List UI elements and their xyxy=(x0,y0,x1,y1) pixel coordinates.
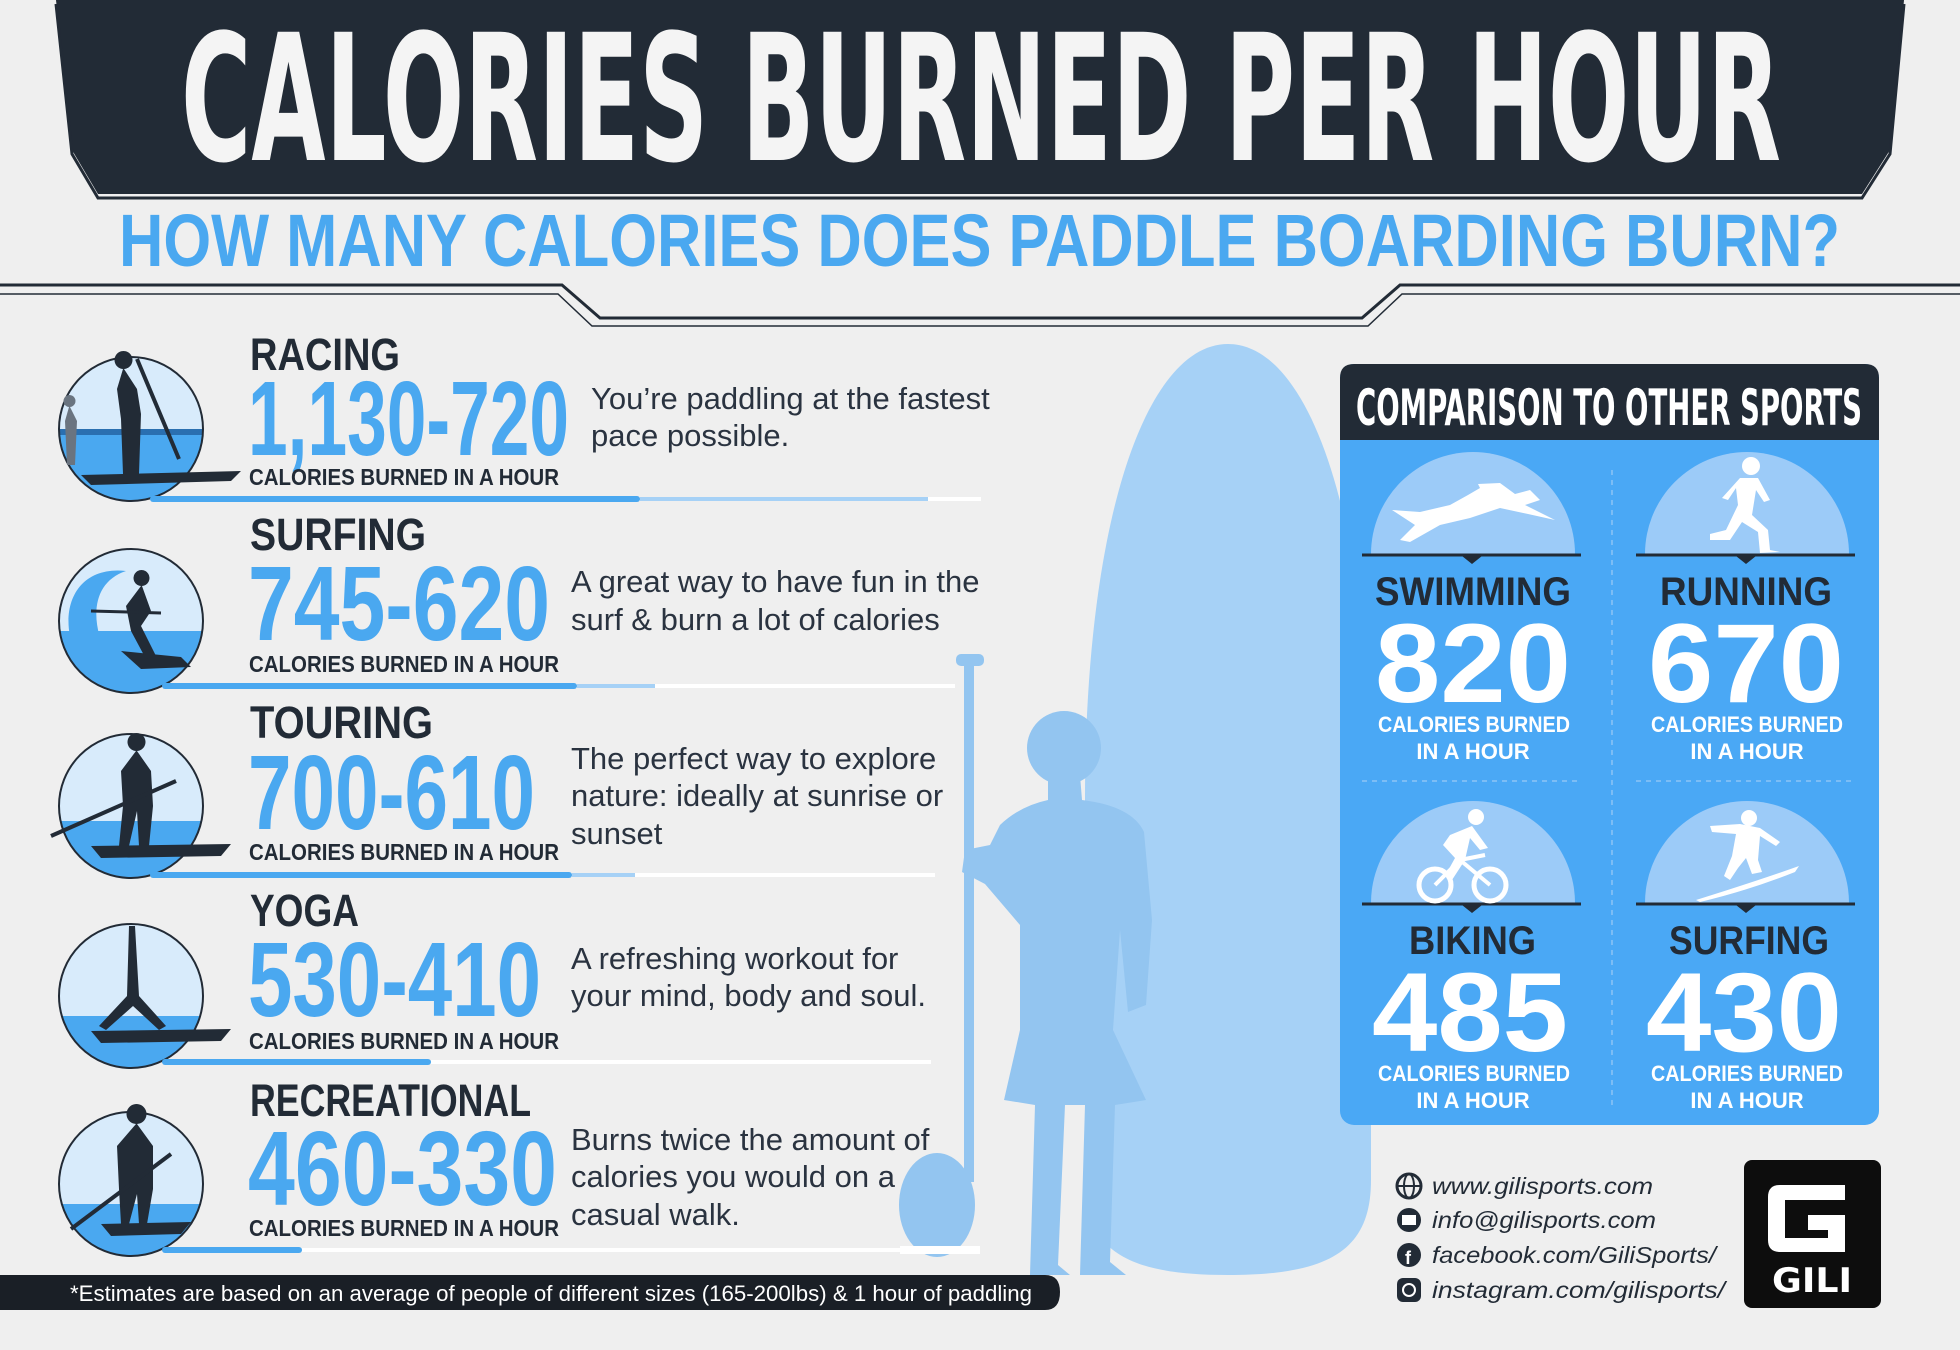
silhouette: paddle xyxy=(899,654,984,1257)
description: surfing: surf & burn a lot of calories xyxy=(571,602,940,637)
card: swimming xyxy=(1362,452,1581,764)
icon: yoga xyxy=(58,923,231,1069)
contacts: www.gilisports.com xyxy=(1432,1173,1653,1199)
icon: racing xyxy=(51,349,241,509)
card: biking: CALORIES BURNED xyxy=(1378,1061,1570,1086)
icon: runner xyxy=(1636,452,1855,564)
card: running: CALORIES BURNED xyxy=(1651,712,1843,737)
row: surfing: CALORIES BURNED IN A HOUR xyxy=(249,651,559,677)
number: surfing: 745-620 xyxy=(248,545,550,663)
icon: facebook xyxy=(1397,1243,1421,1268)
icon: touring xyxy=(51,726,231,886)
description: yoga: your mind, body and soul. xyxy=(571,978,926,1013)
description: racing: pace possible. xyxy=(591,418,789,453)
description: touring: The perfect way to explore xyxy=(571,741,936,776)
card: surfing: SURFING xyxy=(1669,919,1829,963)
number: racing: 1,130-720 xyxy=(248,360,569,478)
icon: email xyxy=(1397,1208,1421,1232)
card: running xyxy=(1636,452,1855,764)
row: recreational xyxy=(58,1084,930,1257)
card: surfing: CALORIES BURNED xyxy=(1651,1061,1843,1086)
description: recreational: Burns twice the amount of xyxy=(571,1122,930,1157)
silhouette: paddle board xyxy=(1085,344,1371,1275)
silhouette: man xyxy=(962,711,1152,1275)
card: surfing: 430 xyxy=(1646,950,1842,1075)
label: surfing: SURFING xyxy=(250,509,426,560)
icon: swimmer xyxy=(1362,452,1581,564)
card: running: IN A HOUR xyxy=(1690,739,1804,764)
card: swimming: CALORIES BURNED xyxy=(1378,712,1570,737)
card: biking: BIKING xyxy=(1409,919,1536,963)
description: touring: nature: ideally at sunrise or xyxy=(571,778,943,813)
description: surfing: A great way to have fun in the xyxy=(571,564,979,599)
row: racing: CALORIES BURNED IN A HOUR xyxy=(249,464,559,490)
header banner xyxy=(56,0,1904,202)
row: touring: CALORIES BURNED IN A HOUR xyxy=(249,839,559,865)
icon: surfer xyxy=(1636,801,1855,913)
description: recreational: casual walk. xyxy=(571,1197,740,1232)
contacts: facebook.com/GiliSports/ xyxy=(1432,1242,1719,1268)
card: running: 670 xyxy=(1648,601,1844,726)
row: touring xyxy=(51,697,943,886)
card: biking: IN A HOUR xyxy=(1416,1088,1530,1113)
contacts: info@gilisports.com xyxy=(1432,1207,1656,1233)
icon: instagram xyxy=(1397,1278,1421,1302)
card: swimming: 820 xyxy=(1375,601,1571,726)
contacts xyxy=(1397,1173,1728,1303)
card: surfing xyxy=(1636,801,1855,1113)
row: yoga: CALORIES BURNED IN A HOUR xyxy=(249,1028,559,1054)
icon: facebook: f xyxy=(1405,1248,1412,1268)
card: running: RUNNING xyxy=(1660,570,1832,614)
card: biking: 485 xyxy=(1372,950,1568,1075)
card: biking xyxy=(1362,801,1581,1113)
number: touring: 700-610 xyxy=(248,734,535,852)
logo: GILI xyxy=(1744,1160,1881,1308)
row: yoga xyxy=(51,885,931,1076)
row: recreational: CALORIES BURNED IN A HOUR xyxy=(249,1215,559,1241)
label: racing: RACING xyxy=(250,329,400,380)
label: yoga: YOGA xyxy=(250,885,359,936)
footnote bar xyxy=(0,1275,1060,1310)
label: recreational: RECREATIONAL xyxy=(250,1075,531,1126)
icon: recreational xyxy=(58,1104,204,1257)
row: racing xyxy=(51,329,990,509)
description: touring: sunset xyxy=(571,816,663,851)
contacts: instagram.com/gilisports/ xyxy=(1432,1277,1728,1303)
description: yoga: A refreshing workout for xyxy=(571,941,898,976)
icon: surfing xyxy=(58,548,204,694)
label: touring: TOURING xyxy=(250,697,433,748)
description: recreational: calories you would on a xyxy=(571,1159,896,1194)
card: surfing: IN A HOUR xyxy=(1690,1088,1804,1113)
icon: cyclist xyxy=(1362,801,1581,913)
logo: GILI: GILI xyxy=(1772,1261,1852,1301)
icon: globe xyxy=(1397,1174,1421,1198)
number: recreational: 460-330 xyxy=(248,1110,557,1228)
description: racing: You’re paddling at the fastest xyxy=(591,381,990,416)
card: swimming: IN A HOUR xyxy=(1416,739,1530,764)
card: swimming: SWIMMING xyxy=(1375,570,1571,614)
number: yoga: 530-410 xyxy=(248,921,541,1039)
panel: comparison to other sports xyxy=(1340,364,1879,1125)
row: surfing xyxy=(51,509,979,701)
footnote bar: *Estimates are based on an average of people of different sizes (165-200lbs) & 1 hour of paddling xyxy=(70,1281,1032,1306)
